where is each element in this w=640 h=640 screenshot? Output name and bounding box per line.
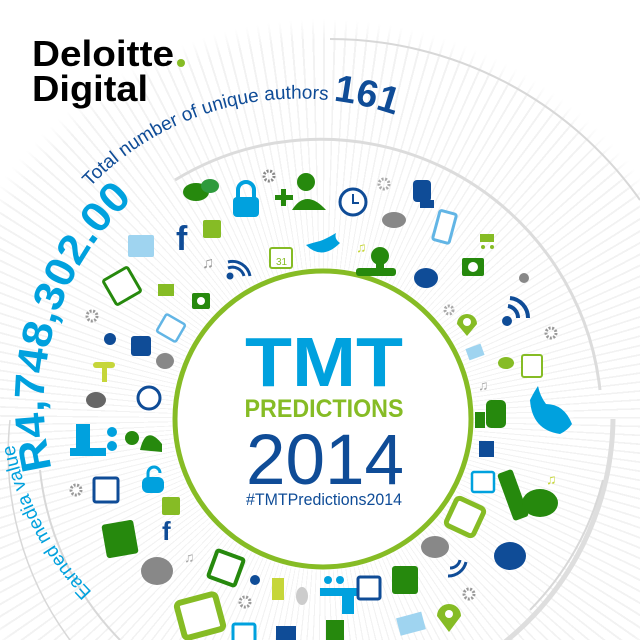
icon: music gray: ♫ (478, 377, 488, 393)
icon: gear (87, 311, 97, 321)
icon: cloud (382, 212, 406, 228)
icon: cloud gray (156, 353, 174, 369)
icon: add user (275, 173, 326, 210)
icon: add user green (125, 431, 162, 452)
icon: chat navy (494, 542, 526, 570)
icon: location pin (457, 314, 477, 336)
icon: twitter bird (306, 233, 340, 253)
icon: gear (379, 179, 389, 189)
central ring (175, 271, 471, 567)
icon: piggy (421, 536, 449, 558)
icon: lock (233, 182, 259, 217)
icon: stamp (356, 247, 396, 276)
icon: keypad (472, 472, 494, 492)
icon: camera (462, 258, 484, 276)
logo: Digital (32, 68, 148, 109)
year: 2014 (246, 421, 404, 500)
icon: twitter large (530, 386, 572, 434)
icon: music: ♫ (184, 549, 194, 565)
icon: bulb (86, 392, 106, 408)
icon: music lime: ♫ (546, 471, 556, 487)
icon: calendar: 31 (276, 257, 288, 268)
hashtag: #TMTPredictions2014 (246, 490, 402, 509)
icon: calendar lime (522, 355, 542, 377)
arc text: unique authors: Total number of unique authors 161 (81, 76, 396, 184)
icon: play (104, 333, 116, 345)
icon: lock blue (142, 467, 164, 493)
arc text: earned media value label: Earned media value (5, 446, 91, 600)
icon: gear (264, 171, 274, 181)
logo (32, 33, 185, 109)
icon: chess (519, 273, 529, 283)
icon: thumbs down (131, 336, 151, 356)
icon ring (70, 171, 572, 640)
icon: location green (437, 604, 461, 632)
icon: play (250, 575, 260, 585)
icon: wifi navy (504, 298, 528, 324)
icon: tv lime (176, 593, 224, 639)
icon: film (94, 478, 118, 502)
icon: camera green (192, 293, 210, 309)
icon: floppy (203, 220, 221, 238)
icon: gear (546, 328, 556, 338)
icon: chair blue (320, 576, 358, 614)
icon: stamp large (497, 469, 558, 521)
icon: chip (479, 441, 494, 457)
subtitle: predictions: PREDICTIONS (244, 395, 404, 423)
icon: piggy (141, 557, 173, 585)
icon: chip navy (276, 626, 296, 640)
icon: thumbs up green (475, 400, 506, 428)
icon: phone (432, 210, 457, 244)
icon: music note: ♫ (356, 239, 366, 255)
icon: tablet (156, 314, 186, 342)
icon: trash green (392, 566, 418, 594)
icon: block green (326, 620, 344, 640)
icon: thumbs up (413, 180, 434, 208)
title: TMT: TMT (245, 323, 403, 401)
icon: printer (128, 235, 154, 257)
icon: bulb (296, 587, 308, 605)
icon: bird lime (498, 357, 514, 369)
icon: gear (240, 597, 250, 607)
logo: Deloitte (32, 33, 174, 74)
icon: clock navy (138, 387, 160, 409)
icon: facebook: f (176, 220, 188, 258)
icon: facebook small: f (162, 516, 171, 546)
icon: mic (93, 362, 115, 382)
icon: floppy lime (162, 497, 180, 515)
icon: gear (445, 306, 453, 314)
icon: laptop green (208, 550, 244, 586)
icon: cart lime (158, 284, 174, 296)
icon: tv (445, 497, 485, 537)
icon: clock (340, 189, 366, 215)
icon: mail (465, 344, 485, 360)
icon: gear (71, 485, 81, 495)
icon: trash (101, 519, 139, 559)
icon: calendar (270, 248, 292, 268)
icon: chat (414, 268, 438, 288)
icon: keypad blue (233, 624, 255, 640)
icon: wifi (228, 261, 250, 278)
icon: cart (480, 234, 494, 249)
icon: speech bubbles (183, 179, 219, 201)
arc text: earned media value number: R4,748,302.00 (14, 184, 128, 472)
icon: chair (70, 424, 117, 456)
icon: gear (464, 589, 474, 599)
icon: mail (396, 612, 426, 636)
icon: music gray: ♫ (202, 255, 214, 272)
icon: laptop (103, 267, 141, 305)
icon: mic lime (272, 578, 284, 600)
icon: film navy (358, 577, 380, 599)
icon: wifi small (448, 560, 466, 576)
